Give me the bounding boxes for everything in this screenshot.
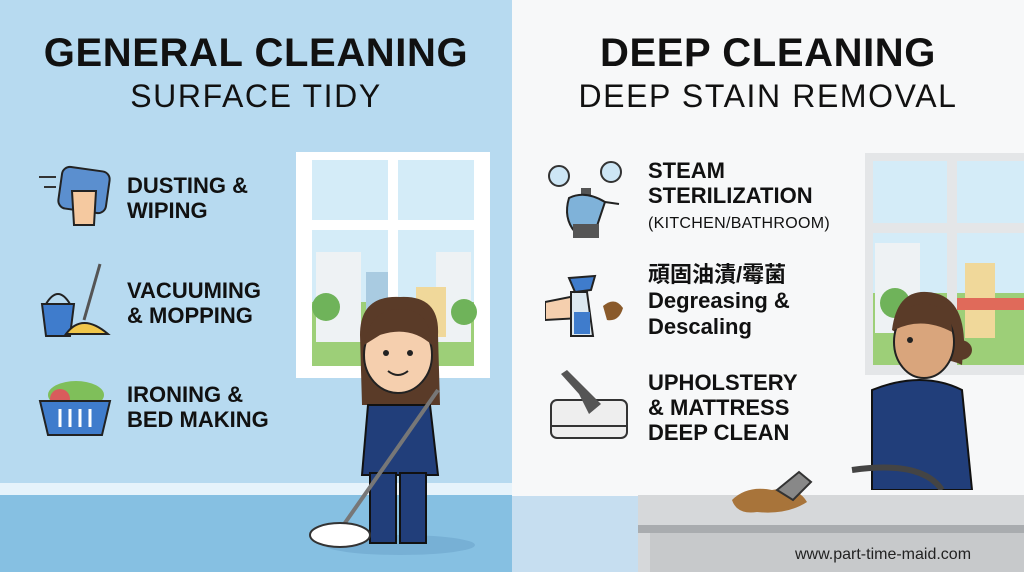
icon: cloth hand	[39, 166, 111, 226]
text	[648, 370, 798, 445]
figure: maid deep cleaning	[852, 292, 973, 490]
text: & MOPPING	[127, 303, 253, 328]
counter	[512, 496, 1024, 572]
text	[648, 262, 790, 339]
text: STEAM	[648, 158, 725, 183]
text: BED MAKING	[127, 407, 269, 432]
text: (KITCHEN/BATHROOM)	[648, 215, 830, 232]
floor	[0, 483, 512, 495]
text: WIPING	[127, 198, 208, 223]
text: DUSTING &	[127, 173, 248, 198]
panel: general cleaning	[0, 0, 512, 572]
title: GENERAL CLEANING	[44, 31, 468, 75]
text: VACUUMING	[127, 278, 261, 303]
subtitle: DEEP STAIN REMOVAL	[578, 78, 958, 114]
panel: deep cleaning	[512, 0, 1024, 572]
icon: laundry basket	[38, 381, 112, 436]
text: & MATTRESS	[648, 395, 789, 420]
icon: steamer	[548, 161, 622, 238]
text: 頑固油漬/霉菌	[648, 262, 786, 287]
item: steam	[548, 158, 830, 238]
subtitle: SURFACE TIDY	[130, 78, 382, 114]
text: DEEP CLEAN	[648, 420, 789, 445]
text: Degreasing &	[648, 288, 790, 313]
figure: maid mopping	[309, 296, 475, 555]
text: STERILIZATION	[648, 183, 813, 208]
icon: mattress	[550, 370, 628, 439]
text	[127, 278, 261, 328]
text	[127, 382, 269, 432]
window left	[296, 152, 490, 378]
item: dusting	[39, 166, 248, 226]
url: www.part-time-maid.com	[795, 546, 971, 563]
item: upholstery	[550, 370, 798, 445]
icon: bucket mop	[40, 264, 111, 337]
text: UPHOLSTERY	[648, 370, 798, 395]
text: Descaling	[648, 314, 752, 339]
text	[648, 158, 830, 232]
item: vacuuming	[40, 264, 261, 337]
window right	[865, 153, 1024, 375]
text: IRONING &	[127, 382, 243, 407]
text	[127, 173, 248, 223]
icon: spray bottle	[545, 274, 623, 337]
icon: stain & nozzle	[732, 470, 812, 513]
title: DEEP CLEANING	[600, 31, 936, 75]
item: degreasing	[545, 262, 790, 339]
item: ironing	[38, 381, 269, 436]
